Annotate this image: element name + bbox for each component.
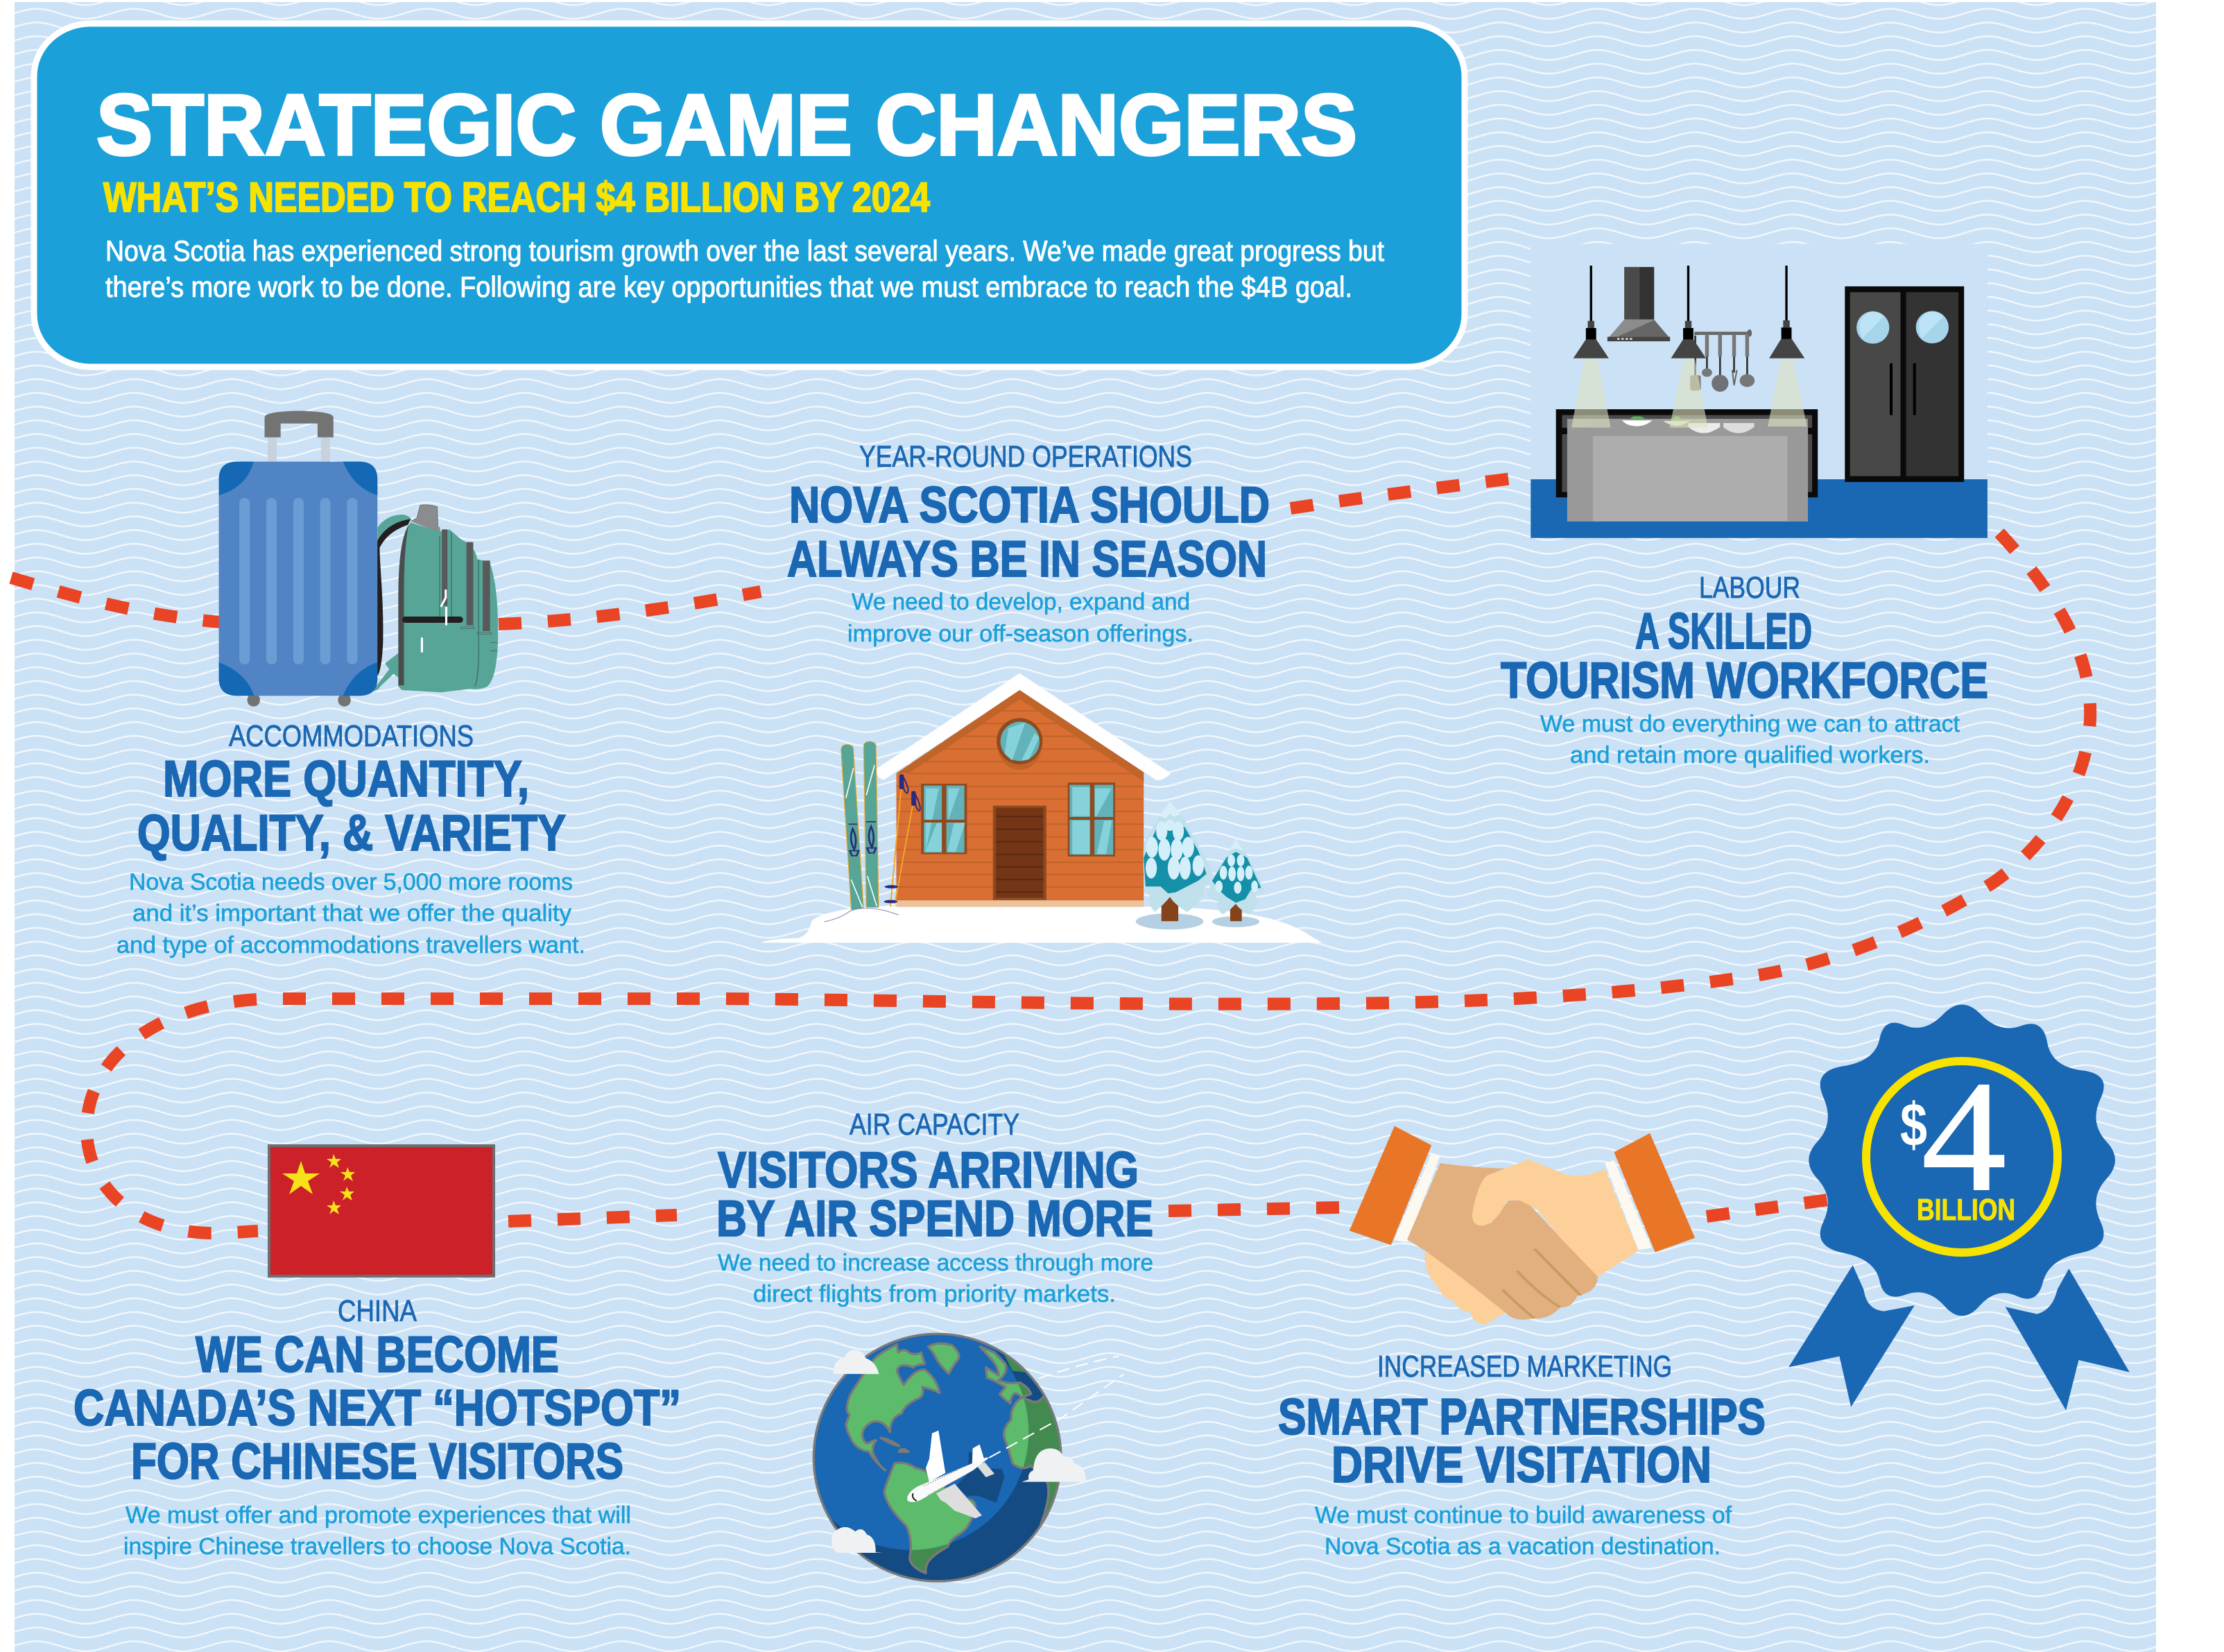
dashed route line	[11, 479, 2090, 1233]
icon: China flag	[269, 1146, 494, 1276]
text block: labour: A SKILLED	[1635, 603, 1812, 660]
left cuff	[1350, 1126, 1440, 1245]
big snowy tree	[1144, 801, 1213, 921]
text block: labour: and retain more qualified workers.	[1570, 742, 1930, 768]
lamp light beams	[1571, 359, 1807, 427]
text block: China: CANADA’S NEXT “HOTSPOT”	[74, 1380, 681, 1436]
text block: year-round operations: YEAR-ROUND OPERATIONS	[859, 440, 1192, 474]
airplane	[907, 1431, 1004, 1518]
text block: accommodations: and type of accommodations travellers want.	[117, 932, 585, 958]
icon: globe with airplane	[813, 1333, 1123, 1583]
text block: year-round operations: NOVA SCOTIA SHOULD	[789, 477, 1270, 533]
text block: air capacity	[716, 1108, 1153, 1307]
utensil rack	[1690, 329, 1755, 392]
kitchen island	[1567, 415, 1808, 522]
house	[897, 690, 1144, 907]
text block: China: WE CAN BECOME	[196, 1327, 559, 1383]
text block: increased marketing: Nova Scotia as a vacation destination.	[1325, 1533, 1721, 1560]
text block: year-round operations: We need to develop, expand and	[852, 589, 1190, 615]
text block: accommodations: Nova Scotia needs over 5,000 more rooms	[129, 869, 573, 895]
text block: air capacity: AIR CAPACITY	[850, 1108, 1019, 1142]
text block: China: We must offer and promote experiences that will	[126, 1502, 631, 1529]
icon: winter cabin with skis and trees	[760, 673, 1322, 943]
right cuff	[1605, 1133, 1695, 1253]
intro text	[105, 234, 1384, 303]
intro text: Nova Scotia has experienced strong tourism growth over the last several years. We’ve made great progress but	[105, 234, 1384, 267]
text block: accommodations: MORE QUANTITY,	[163, 751, 529, 807]
text block: air capacity: We need to increase access through more	[718, 1250, 1153, 1276]
text block: increased marketing: INCREASED MARKETING	[1377, 1350, 1672, 1384]
refrigerator	[1845, 286, 1964, 482]
text block: increased marketing: SMART PARTNERSHIPS	[1278, 1389, 1766, 1445]
text block: accommodations: ACCOMMODATIONS	[229, 720, 474, 753]
suitcase	[219, 411, 377, 707]
text block: China: CHINA	[338, 1295, 417, 1328]
icon: four billion ribbon badge	[1788, 1005, 2130, 1411]
subtitle: WHAT’S NEEDED TO REACH $4 BILLION BY 2024	[103, 174, 931, 221]
intro text: there’s more work to be done. Following are key opportunities that we must embrace to reach the $4B goal.	[105, 270, 1352, 303]
header panel	[34, 24, 1465, 367]
text block: labour	[1501, 571, 1988, 768]
floor	[1531, 479, 1988, 538]
snowy ground	[760, 906, 1322, 943]
text block: year-round operations	[787, 440, 1270, 647]
text block: air capacity: direct flights from priority markets.	[753, 1281, 1116, 1307]
text block: year-round operations: improve our off-season offerings.	[847, 621, 1193, 647]
text block: year-round operations: ALWAYS BE IN SEASON	[787, 531, 1267, 587]
title: STRATEGIC GAME CHANGERS	[96, 78, 1357, 173]
text block: increased marketing: DRIVE VISITATION	[1331, 1437, 1712, 1493]
text block: accommodations	[117, 720, 585, 958]
text block: labour: We must do everything we can to attract	[1540, 711, 1960, 737]
text block: accommodations: and it’s important that we offer the quality	[132, 900, 571, 927]
globe	[813, 1333, 1062, 1583]
text block: air capacity: VISITORS ARRIVING	[718, 1142, 1139, 1198]
clouds	[831, 1350, 1086, 1553]
text block: accommodations: QUALITY, & VARIETY	[137, 805, 566, 861]
text block: labour: TOURISM WORKFORCE	[1501, 653, 1988, 709]
text block: China	[74, 1295, 681, 1560]
icon: four billion ribbon badge: 4	[1922, 1049, 2006, 1224]
range hood	[1607, 267, 1670, 341]
contrails	[990, 1356, 1123, 1458]
icon: kitchen scene	[1531, 244, 1988, 538]
pendant lamps	[1574, 266, 1804, 359]
ribbon rosette	[1788, 1005, 2130, 1411]
badge value: $	[1900, 1090, 1927, 1159]
text block: China: FOR CHINESE VISITORS	[131, 1434, 623, 1490]
icon: suitcase and backpack	[219, 411, 498, 707]
backpack	[370, 505, 498, 692]
hands	[1407, 1160, 1638, 1325]
back counter	[1556, 409, 1818, 497]
icon: four billion ribbon badge: BILLION	[1917, 1193, 2015, 1227]
snow roof	[875, 673, 1171, 780]
text block: labour: LABOUR	[1699, 571, 1800, 605]
text block: China: inspire Chinese travellers to choose Nova Scotia.	[123, 1533, 631, 1560]
text block: increased marketing: We must continue to build awareness of	[1315, 1502, 1732, 1529]
text block: increased marketing	[1278, 1350, 1766, 1560]
skis and poles	[824, 741, 920, 922]
tree shadows	[1136, 913, 1259, 929]
small snowy tree	[1207, 838, 1265, 921]
yellow ring	[1866, 1061, 2058, 1253]
text block: air capacity: BY AIR SPEND MORE	[716, 1191, 1153, 1247]
icon: handshake	[1350, 1126, 1695, 1325]
